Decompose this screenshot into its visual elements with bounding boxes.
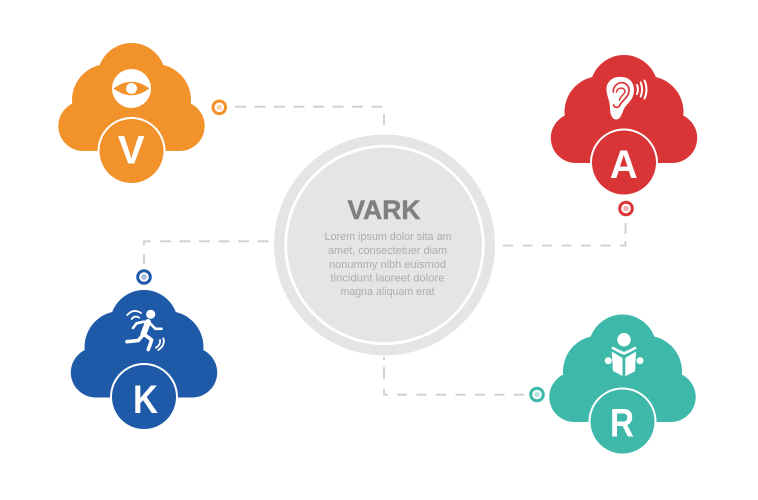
icon: person reading book	[605, 333, 644, 376]
badge: A	[590, 128, 658, 196]
heading: VARK: VARK	[348, 195, 420, 225]
text block: description: Lorem ipsum dolor sita am	[324, 231, 452, 243]
panel: A auditory	[551, 55, 697, 196]
connector: K to center	[144, 241, 268, 264]
connector: A to center	[503, 223, 626, 246]
badge: V	[98, 117, 166, 185]
text block: description: tincidunt laoreet dolore	[330, 272, 445, 284]
panel: center circle	[274, 134, 495, 356]
badge: K	[110, 363, 178, 431]
badge: A: A	[610, 143, 638, 187]
icon: eye	[112, 69, 151, 108]
cloud: K	[71, 290, 217, 398]
icon: running person	[127, 310, 164, 350]
panel: R reading	[549, 314, 696, 456]
text block: description	[324, 231, 452, 298]
node: R	[529, 387, 545, 402]
badge: V: V	[118, 128, 145, 172]
node: A	[618, 201, 634, 216]
badge: R: R	[610, 402, 634, 446]
panel: K kinesthetic	[71, 290, 217, 431]
connector: V to center	[235, 107, 384, 125]
cloud: V	[58, 43, 205, 151]
text block: description: magna aliquam erat	[340, 286, 435, 298]
badge: R	[588, 388, 656, 456]
node: V	[212, 100, 227, 115]
text block: description: nonummy nibh euismod	[329, 259, 446, 271]
text block: description: amet, consectetuer diam	[328, 245, 447, 257]
node: K	[136, 269, 152, 285]
icon: ear with sound waves	[606, 77, 646, 120]
connector: R to center	[384, 357, 524, 395]
panel: V visual	[58, 43, 205, 185]
badge: K: K	[133, 378, 158, 422]
cloud: R	[549, 314, 696, 422]
cloud: A	[551, 55, 697, 163]
